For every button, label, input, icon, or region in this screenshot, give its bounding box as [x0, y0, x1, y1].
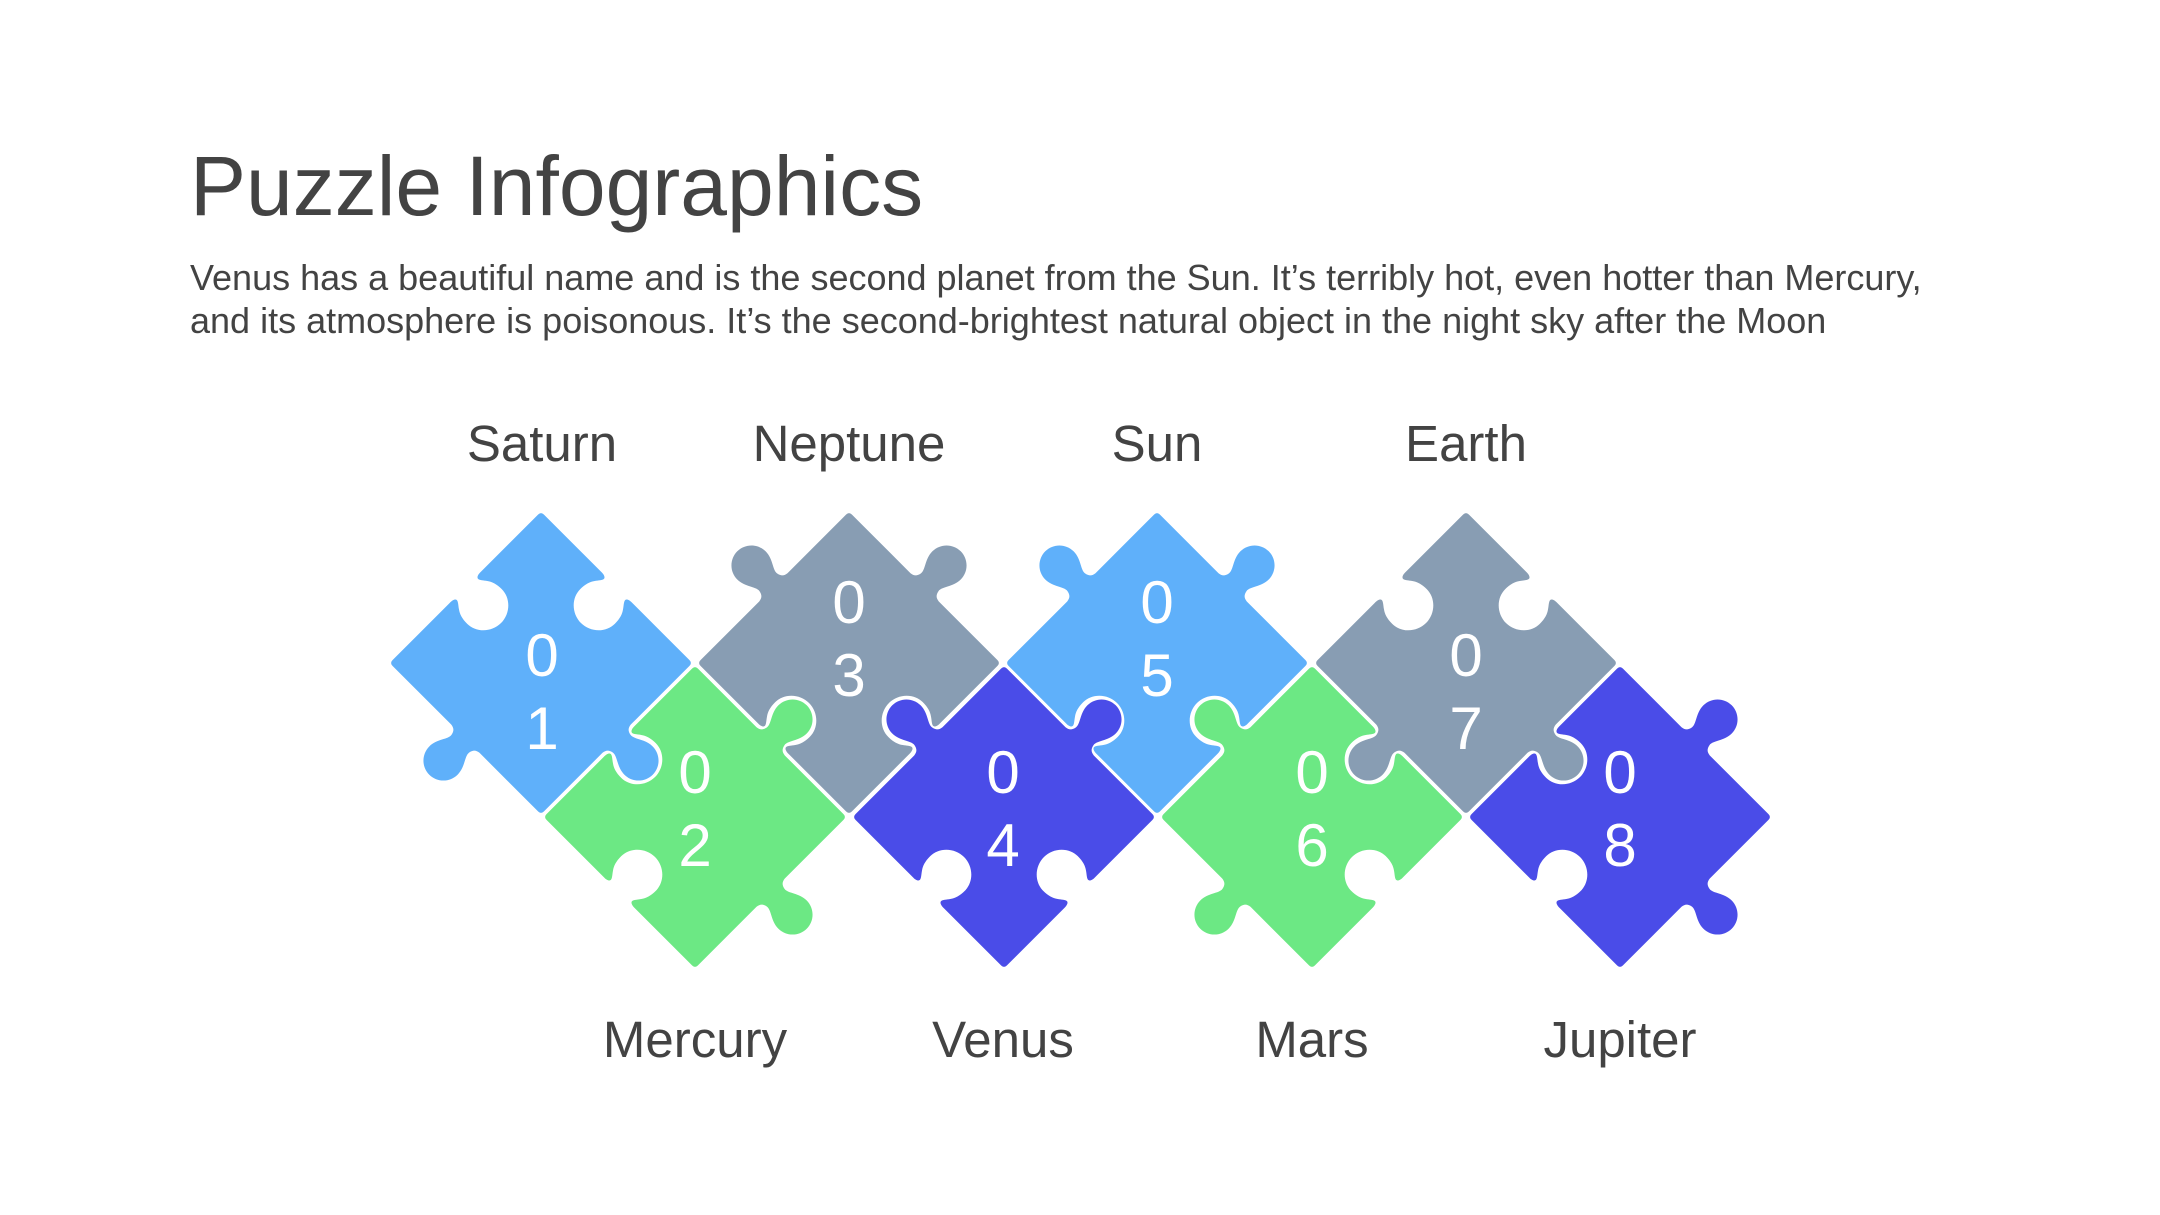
puzzle piece 03 [662, 440, 1036, 814]
puzzle piece 01: 0 [525, 622, 559, 689]
description text [190, 257, 1922, 341]
label: Mercury: Mercury [603, 1011, 788, 1068]
puzzle piece 08 [1469, 630, 1843, 1004]
puzzle piece 07 [1279, 512, 1653, 886]
puzzle piece 06: 0 [1295, 739, 1329, 806]
puzzle piece 02: 0 [678, 739, 712, 806]
title: Puzzle Infographics [190, 139, 923, 233]
puzzle piece 06: 6 [1295, 812, 1329, 879]
puzzle piece 03: 0 [832, 569, 866, 636]
puzzle piece 03: 3 [832, 642, 866, 709]
puzzle piece 04: 4 [986, 812, 1020, 879]
label: Mars: Mars [1255, 1011, 1369, 1068]
puzzle piece 02: 2 [678, 812, 712, 879]
puzzle piece 05 [970, 440, 1344, 814]
puzzle piece 08: 8 [1603, 812, 1637, 879]
puzzle piece 04: 0 [986, 739, 1020, 806]
description text: Venus has a beautiful name and is the second planet from the Sun. It’s terribly hot, even hotter than Mercury, [190, 257, 1922, 298]
puzzle piece 02 [544, 630, 918, 1004]
puzzle piece 04 [817, 594, 1191, 968]
label: Jupiter: Jupiter [1543, 1011, 1697, 1068]
puzzle piece 05: 0 [1140, 569, 1174, 636]
puzzle piece 07: 0 [1449, 622, 1483, 689]
puzzle piece 06 [1089, 630, 1463, 1004]
puzzle piece 05: 5 [1140, 642, 1174, 709]
puzzle piece 01: 1 [525, 695, 559, 762]
label: Neptune: Neptune [753, 415, 945, 472]
label: Venus: Venus [932, 1011, 1074, 1068]
puzzle piece 01 [354, 512, 728, 886]
label: Saturn: Saturn [467, 415, 617, 472]
label: Earth: Earth [1405, 415, 1527, 472]
puzzle piece 08: 0 [1603, 739, 1637, 806]
puzzle piece 07: 7 [1449, 695, 1483, 762]
label: Sun: Sun [1112, 415, 1202, 472]
description text: and its atmosphere is poisonous. It’s the second-brightest natural object in the night sky after the Moon [190, 300, 1826, 341]
